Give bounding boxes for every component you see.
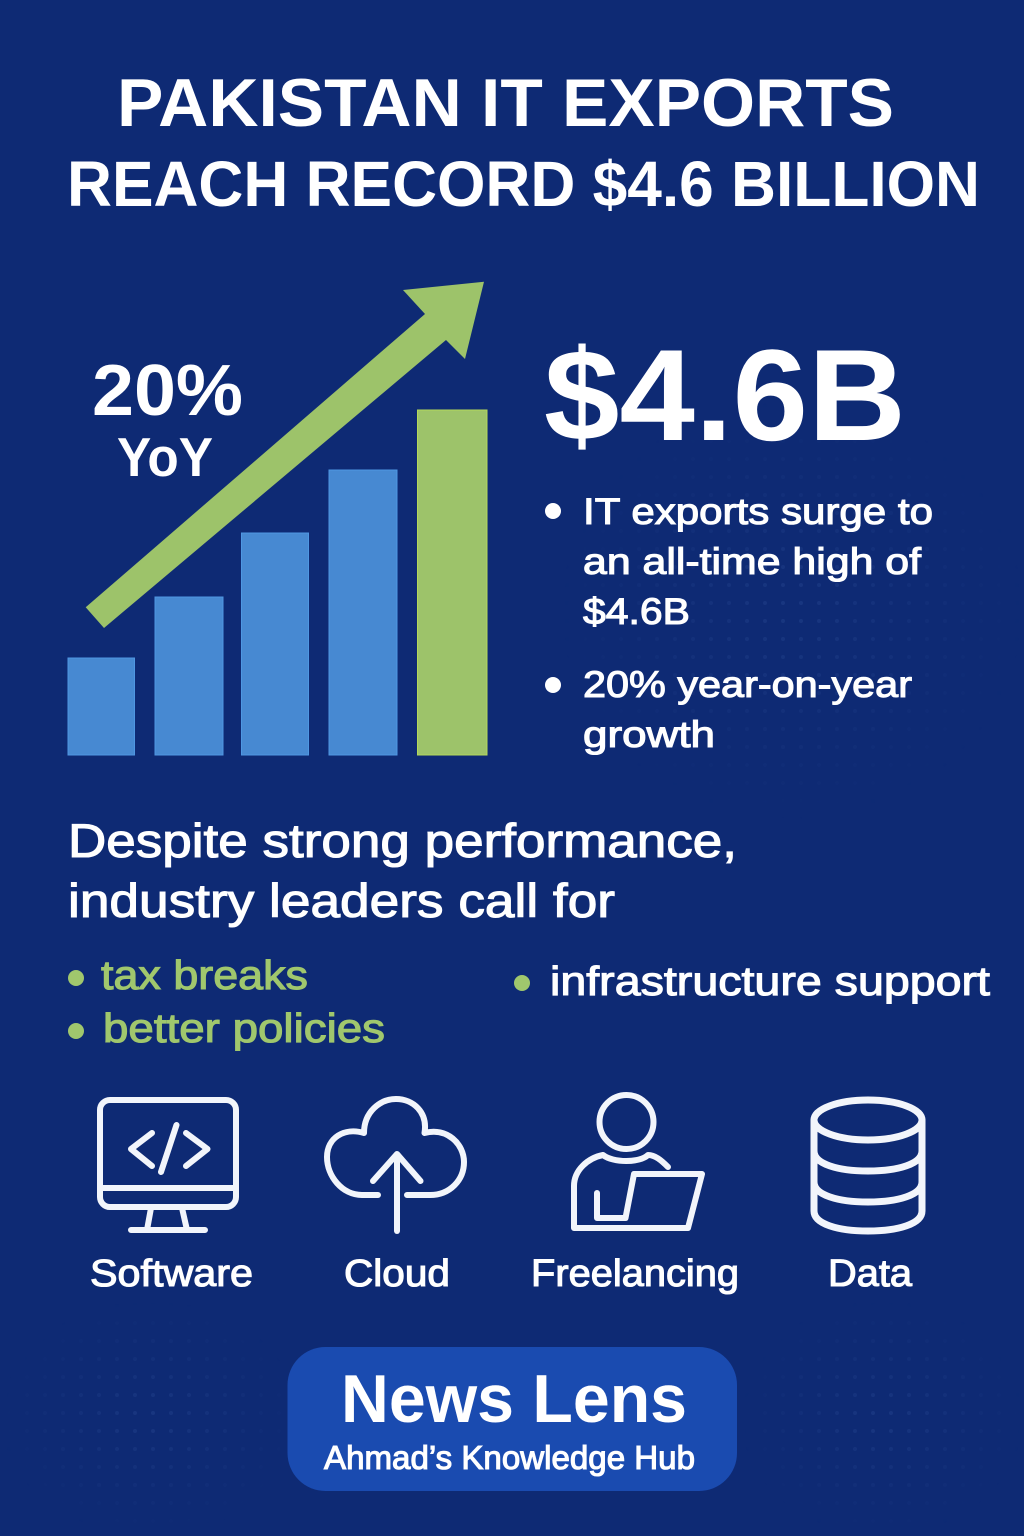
icon: software monitor — [100, 1100, 236, 1230]
bar 3 — [242, 533, 308, 755]
title — [67, 65, 980, 220]
demands list — [68, 952, 991, 1051]
title: REACH RECORD $4.6 BILLION — [67, 148, 980, 220]
growth label: YoY — [117, 426, 213, 488]
brand tagline: Ahmad’s Knowledge Hub — [324, 1439, 695, 1476]
icon: database — [814, 1100, 922, 1231]
bar 4 — [329, 470, 397, 755]
industry call text — [68, 814, 737, 927]
label: freelancing: Freelancing — [531, 1253, 739, 1295]
demand: better policies: better policies — [103, 1005, 385, 1051]
bullet: record high: $4.6B — [583, 591, 690, 632]
label: cloud: Cloud — [344, 1253, 450, 1295]
icon: cloud upload — [327, 1099, 464, 1231]
title: PAKISTAN IT EXPORTS — [117, 65, 894, 141]
icon: freelancer with laptop — [574, 1095, 702, 1228]
industry call text: industry leaders call for — [68, 874, 615, 927]
bullet: growth: growth — [583, 714, 715, 755]
growth label — [92, 351, 243, 488]
growth label: 20% — [92, 351, 243, 431]
bullet: record high: an all-time high of — [583, 541, 922, 582]
demand: infrastructure support: infrastructure support — [550, 958, 991, 1004]
label: data: Data — [828, 1253, 913, 1295]
bar chart with growth arrow — [68, 282, 487, 755]
key figure: $4.6B — [544, 322, 906, 468]
bullet: growth: 20% year-on-year — [583, 664, 912, 705]
bar 5 highlighted — [418, 410, 487, 755]
bar 1 — [68, 658, 134, 755]
bullet: growth — [545, 664, 912, 755]
bullet: record high: IT exports surge to — [583, 491, 933, 532]
arrow: growth trend — [86, 282, 484, 628]
bullet: record high — [545, 491, 933, 632]
key facts list — [545, 491, 933, 755]
bar 2 — [155, 597, 223, 755]
industry call text: Despite strong performance, — [68, 814, 737, 867]
badge: news lens — [288, 1347, 737, 1491]
demand: tax breaks: tax breaks — [101, 952, 308, 998]
brand name: News Lens — [341, 1361, 687, 1437]
label: software: Software — [90, 1253, 253, 1295]
